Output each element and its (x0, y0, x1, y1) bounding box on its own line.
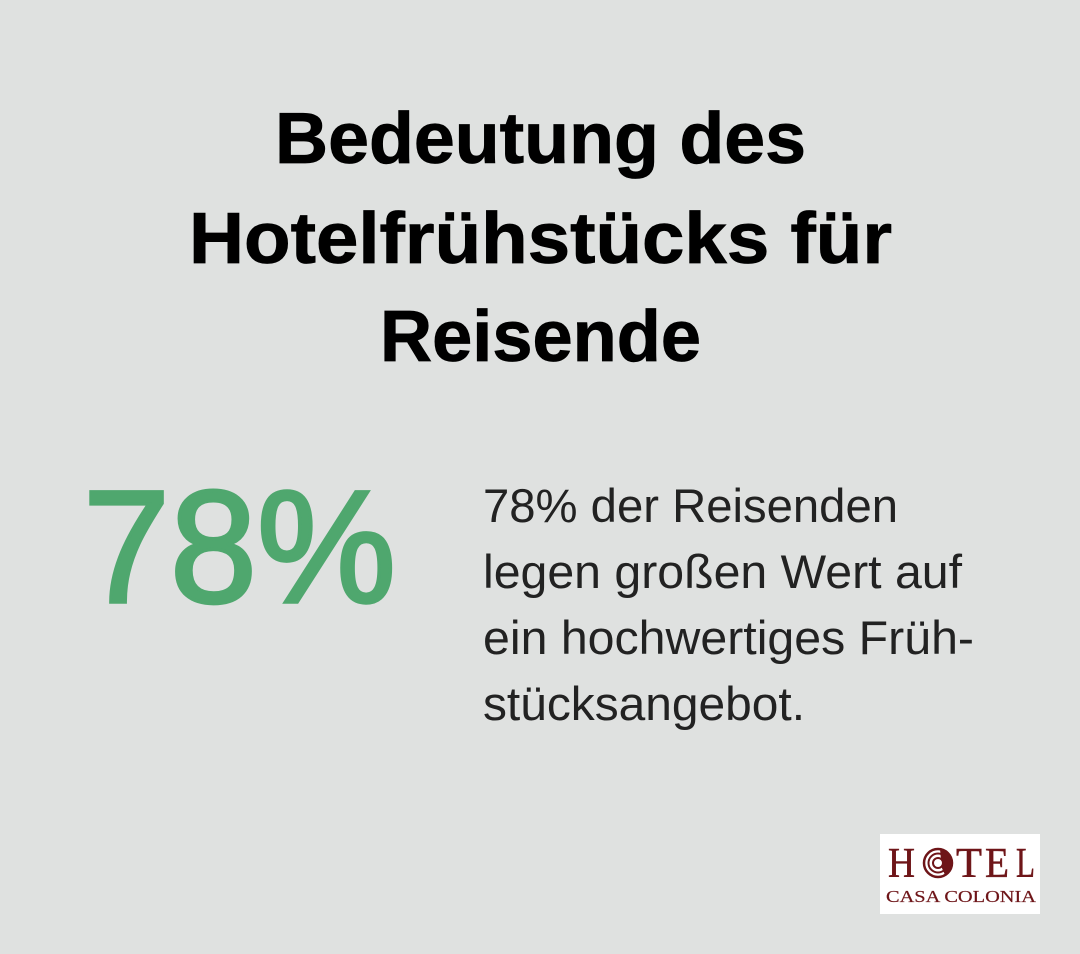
description text: legen großen Wert auf (483, 545, 963, 598)
description text: ein hochwertiges Früh- (483, 611, 974, 664)
title (189, 99, 892, 377)
icon: concentric C emblem (924, 849, 952, 877)
description text: stücksangebot. (483, 677, 805, 730)
title: Bedeutung des (275, 99, 806, 179)
title: Reisende (380, 297, 701, 377)
logo: Hotel Casa Colonia: T (956, 841, 982, 887)
logo: Hotel Casa Colonia: H (888, 841, 915, 887)
logo: Hotel Casa Colonia (880, 834, 1040, 914)
logo: Hotel Casa Colonia: CASA COLONIA (886, 887, 1037, 906)
title: Hotelfrühstücks für (189, 199, 892, 279)
description text: 78% der Reisenden (483, 479, 898, 532)
description text (483, 479, 974, 730)
logo: Hotel Casa Colonia: E (985, 841, 1009, 887)
big statistic: 78%: 78% (83, 457, 396, 636)
logo: Hotel Casa Colonia: L (1016, 841, 1035, 887)
